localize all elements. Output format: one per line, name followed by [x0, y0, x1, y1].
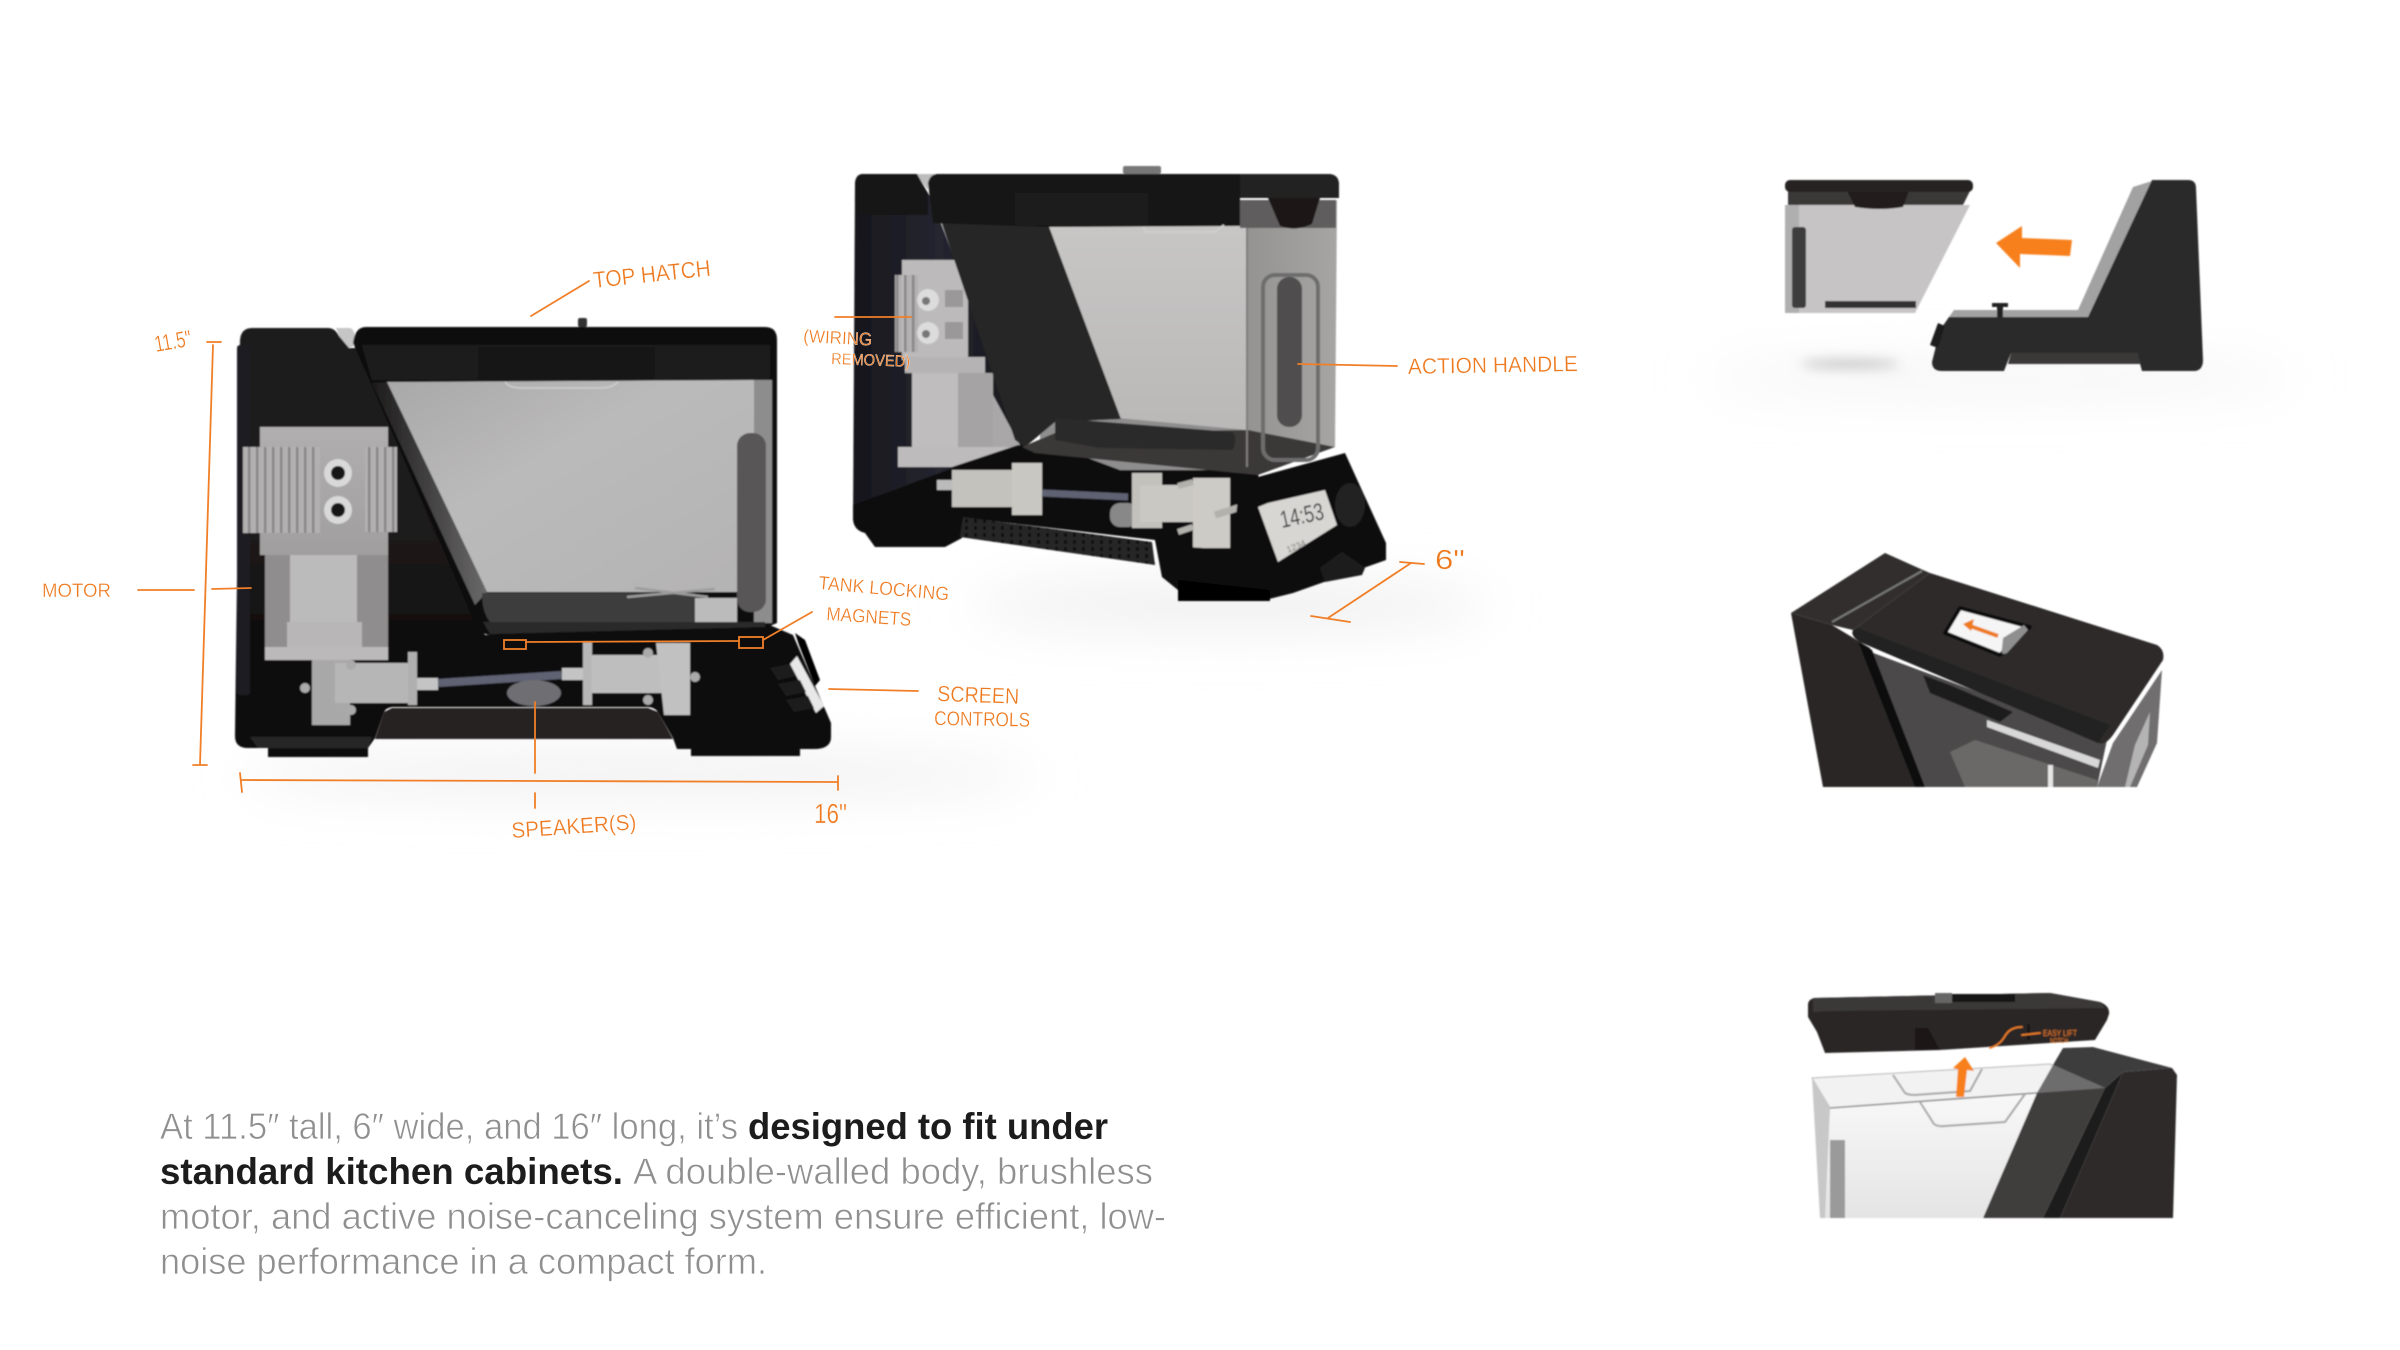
- annotation: top hatch: TOP HATCH: [592, 255, 712, 293]
- panel: tank removal side view: [1785, 180, 2203, 371]
- arrow: lid lifts up: [1953, 1057, 1974, 1097]
- body copy: designed to fit under: [748, 1106, 1108, 1147]
- tank back wall: [1812, 1064, 2105, 1108]
- base vent: [2008, 353, 2141, 364]
- control head: [1160, 453, 1386, 600]
- tank body: [1820, 1093, 2037, 1218]
- speaker: [507, 680, 561, 706]
- latch window: [1945, 608, 2030, 655]
- ground shadows: [240, 366, 2300, 793]
- lid: [1852, 573, 2163, 744]
- tank: [928, 166, 1339, 475]
- annotation: top hatch: [531, 255, 712, 316]
- floating tank shadow: [1800, 360, 1900, 368]
- lid notch: [1923, 675, 2013, 722]
- dock base: [1932, 180, 2203, 371]
- annotation: screen controls: [829, 681, 1030, 732]
- front foot: [1178, 580, 1270, 601]
- body copy: motor, and active noise-canceling system ensure efficient, low-: [160, 1196, 1166, 1237]
- arrow: tank slides left: [1996, 226, 2072, 268]
- tank side glass: [2097, 670, 2162, 787]
- panel: top hatch latch view: [1791, 553, 2163, 787]
- device: three-quarter view: [853, 166, 1386, 601]
- annotation: tank locking magnets: [504, 573, 950, 649]
- motor: [895, 260, 1020, 467]
- annotation: tank locking magnets: TANK LOCKING: [818, 573, 950, 605]
- annotation: 16 inch length: [240, 773, 847, 829]
- rear lower corner: [853, 468, 965, 547]
- right pump: [562, 642, 700, 715]
- back panel: [853, 174, 1025, 532]
- connecting tube: [438, 675, 562, 683]
- body copy: standard kitchen cabinets.: [160, 1151, 623, 1192]
- display: 14:53: [1278, 498, 1326, 534]
- annotation: tank locking magnets: MAGNETS: [826, 604, 912, 631]
- annotation: 16 inch length: 16": [814, 798, 847, 829]
- removed tank: [1785, 180, 1973, 313]
- gray sliver behind lid: [915, 174, 935, 190]
- lower chamber: [952, 445, 1265, 580]
- locking post: [1992, 303, 2008, 317]
- body copy: [160, 1106, 1166, 1282]
- rear foot: [875, 528, 945, 547]
- tank front glass: [1860, 648, 2107, 787]
- annotation: wiring removed: REMOVED): [831, 351, 910, 371]
- left wall strip: [237, 345, 250, 695]
- annotation: 6 inch depth: 6": [1435, 544, 1465, 575]
- body copy: At 11.5″ tall, 6″ wide, and 16″ long, it’s: [160, 1106, 738, 1147]
- dial: [1335, 483, 1365, 527]
- panel: lid lift view: [1808, 993, 2177, 1218]
- body silhouette: [235, 328, 831, 749]
- annotation: screen controls: SCREEN: [937, 681, 1020, 709]
- lid: EASY LIFT: [2043, 1029, 2077, 1038]
- annotation: 11.5 inch height: [152, 325, 221, 765]
- lid: [1808, 993, 2109, 1053]
- motor housing: [243, 427, 397, 660]
- annotation: wiring removed: (WIRING: [803, 326, 873, 350]
- left pump: [300, 652, 438, 725]
- annotation: motor: MOTOR: [42, 581, 111, 602]
- lid: NOTCH: [2050, 1038, 2068, 1045]
- annotation: speakers: SPEAKER(S): [511, 809, 637, 843]
- device: front section view: [235, 318, 831, 757]
- perforated vent: [960, 517, 1155, 565]
- grip notches: [1893, 1069, 2025, 1126]
- base notch: [1320, 552, 1365, 582]
- display: 1234: [1285, 538, 1307, 555]
- annotation: 11.5 inch height: 11.5": [152, 325, 193, 357]
- tower: [1983, 1047, 2177, 1218]
- base gray side: [1949, 181, 2152, 317]
- screen edge and controls: [770, 633, 824, 713]
- annotation: wiring removed: [803, 317, 911, 371]
- base vent: [375, 708, 673, 739]
- body copy: A double-walled body, brushless: [633, 1151, 1153, 1192]
- gray sliver behind tank: [336, 328, 356, 350]
- body copy: noise performance in a compact form.: [160, 1241, 767, 1282]
- annotation: screen controls: CONTROLS: [934, 708, 1030, 732]
- display: [1258, 490, 1337, 562]
- annotation: 6 inch depth: [1311, 544, 1465, 622]
- side button: [1930, 323, 1945, 348]
- pumps and tube: [937, 463, 1247, 548]
- tower: [1791, 613, 1925, 787]
- water tank: [353, 318, 777, 635]
- annotation: action handle: ACTION HANDLE: [1408, 351, 1578, 379]
- feet: [268, 748, 800, 757]
